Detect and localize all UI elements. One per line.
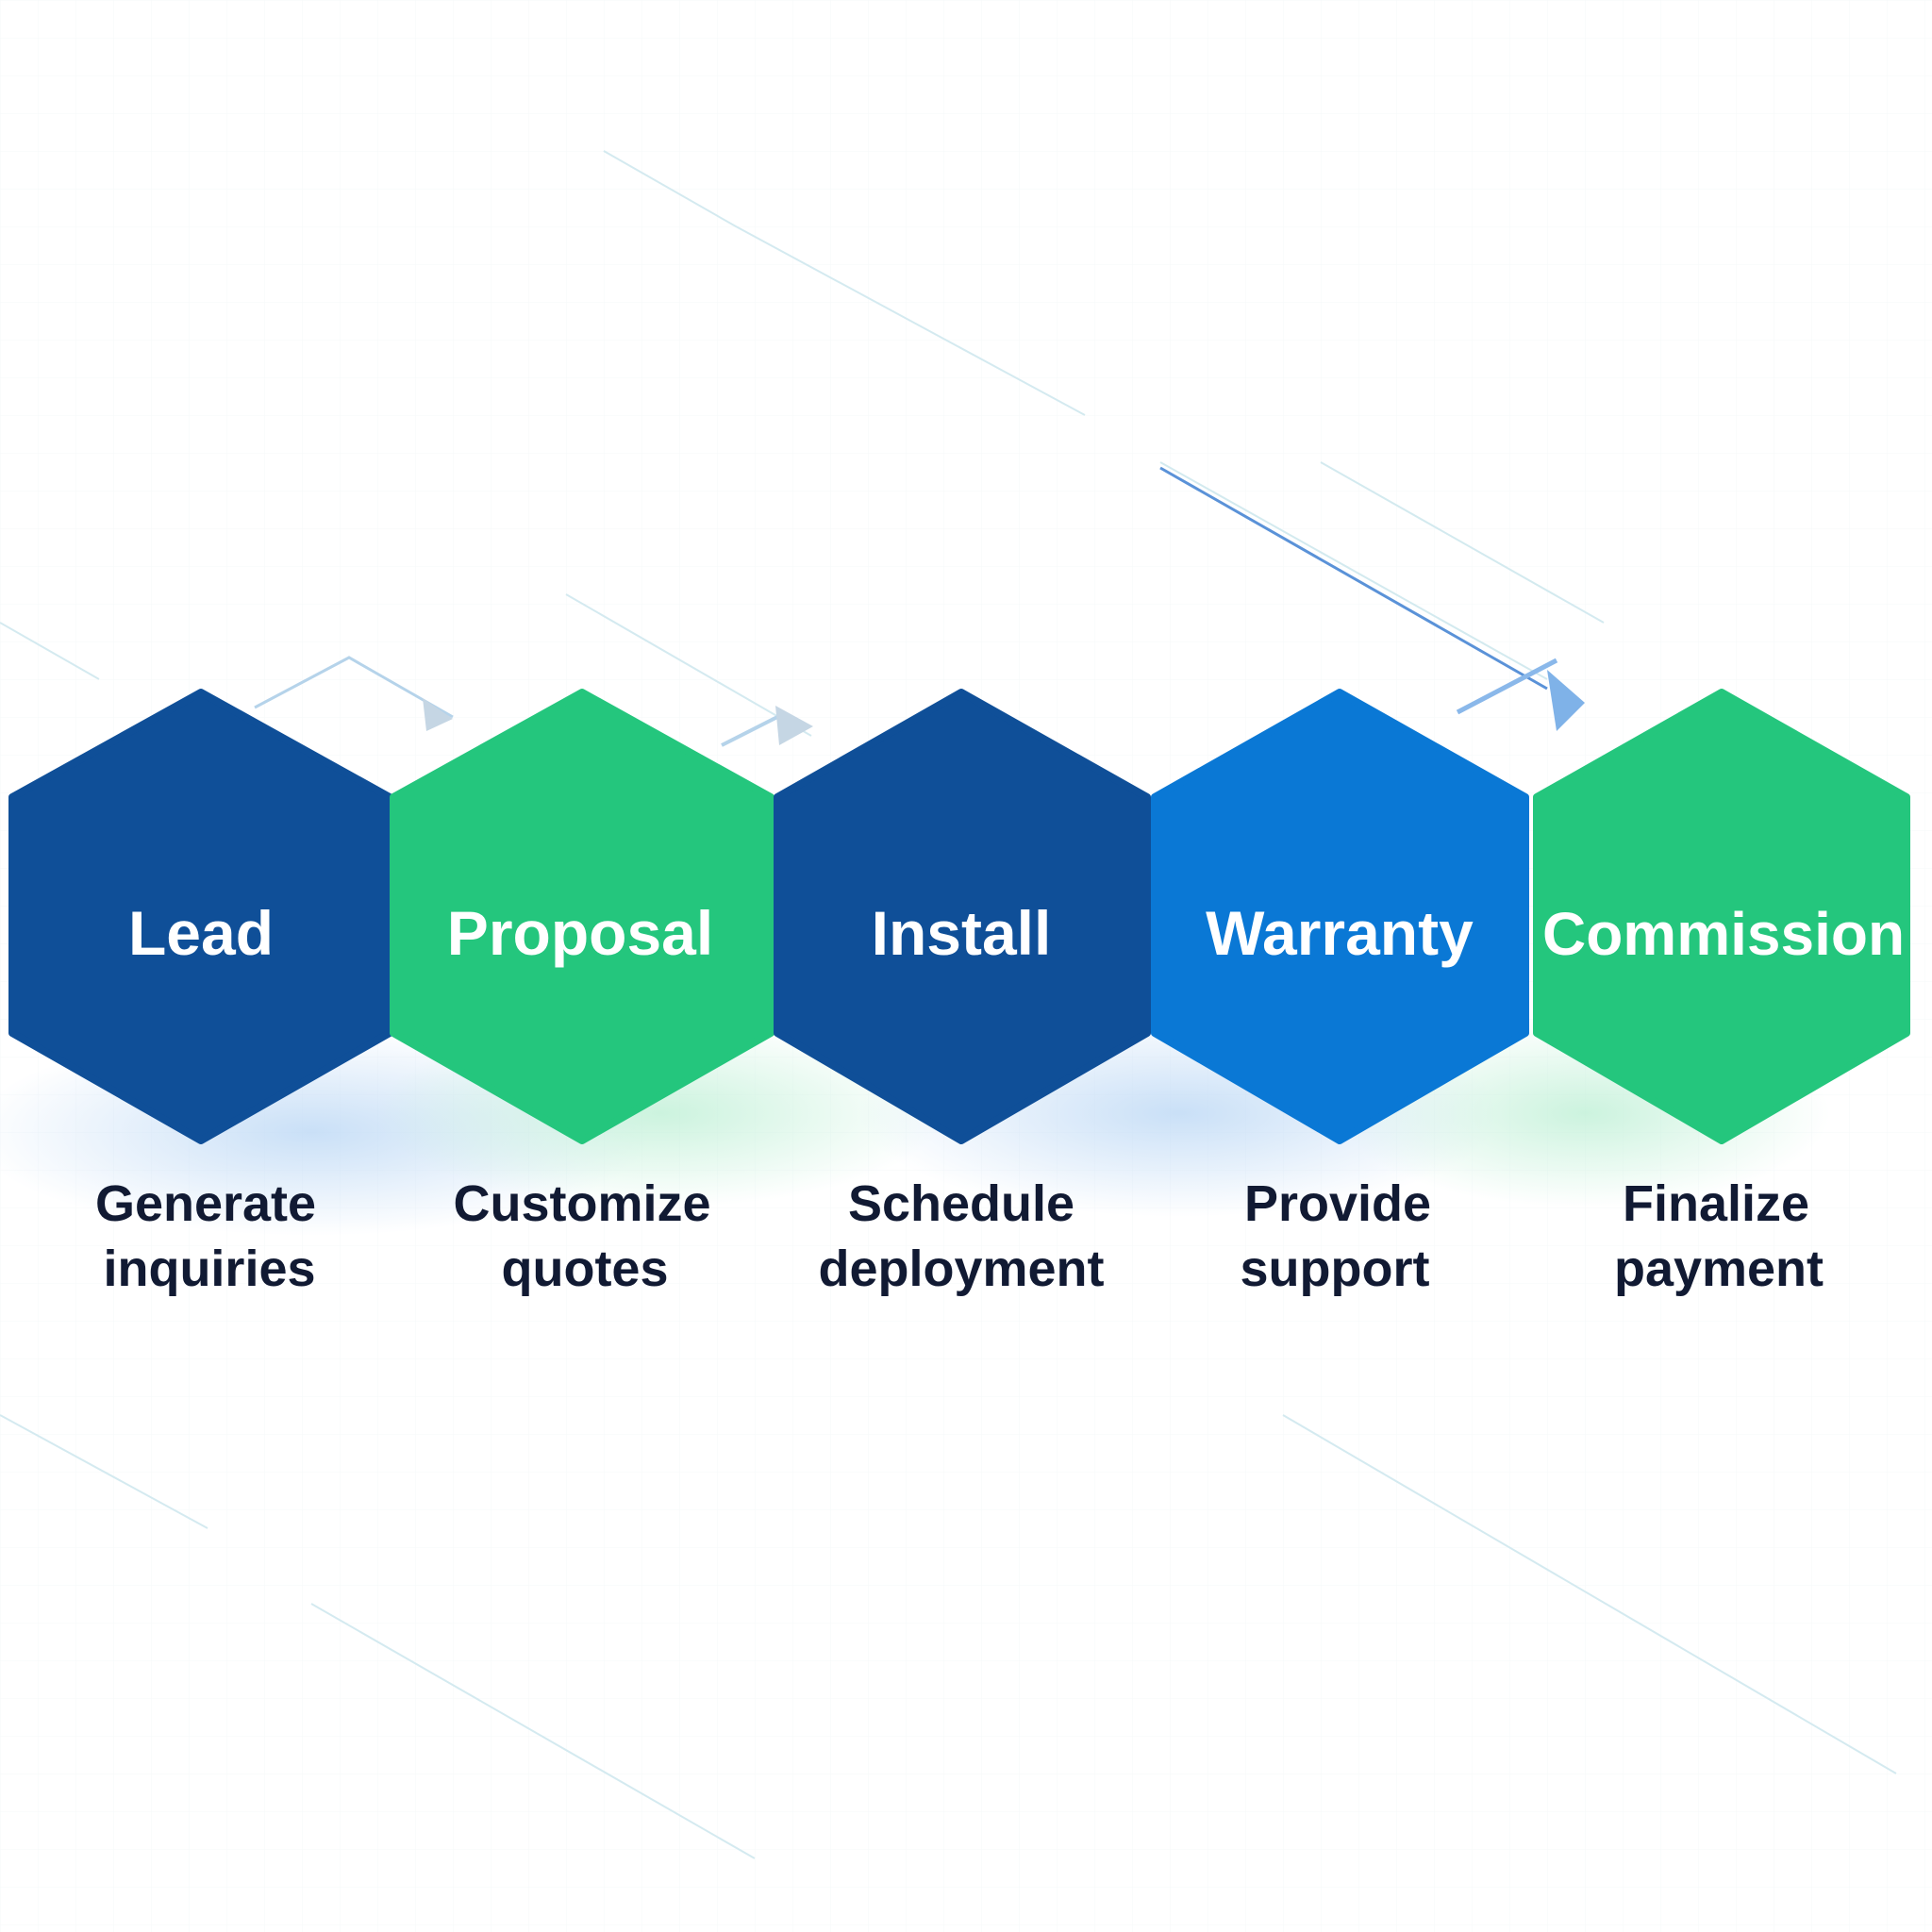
glows (0, 1028, 651, 1236)
step: Proposal: quotes (501, 1241, 669, 1297)
step: Commission: Finalize (1623, 1175, 1809, 1232)
step: Commission (1537, 692, 1907, 1297)
step: Install: Schedule (848, 1175, 1074, 1232)
step: Proposal: Proposal (447, 898, 713, 968)
step: Warranty: Provide (1244, 1175, 1431, 1232)
step: Proposal: Customize (453, 1175, 711, 1232)
step: Install: Install (872, 898, 1051, 968)
step: Install (777, 692, 1147, 1297)
step: Warranty: Warranty (1206, 898, 1474, 968)
step: Commission: payment (1614, 1241, 1824, 1297)
step: Lead (12, 692, 390, 1297)
step: Proposal (393, 692, 771, 1297)
step: Commission: Commission (1542, 900, 1905, 968)
step: Warranty: support (1241, 1241, 1429, 1297)
step: Lead: inquiries (103, 1241, 316, 1297)
step: Install: deployment (818, 1241, 1105, 1297)
step: Warranty (1155, 692, 1525, 1297)
decorative arrows (255, 468, 1585, 745)
step: Lead: Generate (95, 1175, 316, 1232)
step: Lead: Lead (128, 898, 274, 968)
